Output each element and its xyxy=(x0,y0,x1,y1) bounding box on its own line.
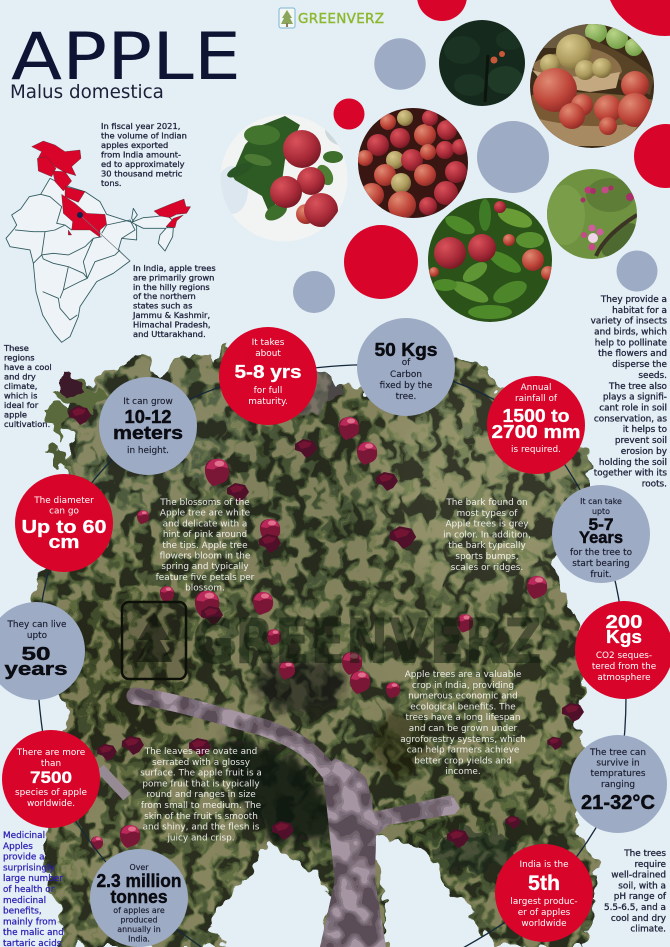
stat: 5th largest producer: largest produc- xyxy=(510,897,578,907)
stat: production: 2.3 million xyxy=(96,870,182,891)
text: bark: sports bumps, xyxy=(455,552,519,562)
stat: height: It can grow xyxy=(123,397,173,407)
text: export volume: In fiscal year 2021, xyxy=(101,121,180,131)
text: leaves and fruit: surface. The apple fruit is a xyxy=(140,769,262,779)
text: economic benefits: Apple trees are a valuable xyxy=(405,670,521,680)
text: soil requirements: climate. xyxy=(630,925,666,935)
stat: years to fruit: for the tree to xyxy=(570,548,632,558)
photo: dark apple tree xyxy=(439,20,525,106)
text: blossoms: The blossoms of the xyxy=(159,498,250,508)
text: habitat and soil conservation: prevent soil xyxy=(615,436,667,446)
stat: temperature: tempratures xyxy=(591,769,646,779)
text: leaves and fruit: and shiny, and the flesh is xyxy=(143,823,260,833)
stat: years to fruit: start bearing xyxy=(572,559,630,569)
stat: CO2 xyxy=(575,601,670,699)
stat: species xyxy=(2,730,100,828)
text: economic benefits: better crop yields and xyxy=(414,756,512,766)
text: climate: These xyxy=(3,343,29,353)
text: leaves and fruit: serrated with a glossy xyxy=(152,758,250,768)
text: blossoms: hint of pink around xyxy=(163,530,247,540)
stat: years to fruit: It can take xyxy=(580,497,622,506)
text: habitat and soil conservation: variety of insects xyxy=(591,317,667,327)
text: export volume: ed to approximately xyxy=(101,159,185,169)
text: medicinal apples: medicinal xyxy=(3,896,46,906)
stat: lifespan: 50 xyxy=(22,643,50,664)
watermark logo xyxy=(122,602,542,679)
text: climate xyxy=(3,343,52,429)
text: habitat and soil conservation: disperse the xyxy=(612,360,667,370)
text: growing regions: states such as xyxy=(133,301,192,311)
text: habitat and soil conservation: plays a signifi- xyxy=(603,393,667,403)
text: export volume: apples exported xyxy=(101,140,168,150)
text: habitat and soil conservation: conservation, as xyxy=(594,414,667,424)
text: blossoms: flowers bloom in the xyxy=(160,552,250,562)
connecting ring xyxy=(36,365,626,947)
text: habitat and soil conservation: the flowers and xyxy=(598,349,667,359)
text: habitat and soil conservation: They provide a xyxy=(600,295,667,305)
logo xyxy=(279,8,384,28)
stat: 5th largest producer xyxy=(495,844,593,942)
photo: apple blossoms xyxy=(547,169,637,259)
text: export volume: 30 thousand metric xyxy=(101,168,183,178)
text: economic benefits: numerous economic and xyxy=(408,692,518,702)
text: habitat and soil conservation: holding the soil xyxy=(599,458,667,468)
text: medicinal apples: of health or xyxy=(3,885,55,895)
text: climate: apple xyxy=(4,410,27,420)
stat: years to fruit: fruit. xyxy=(590,570,612,580)
text: leaves and fruit: pome fruit that is typically xyxy=(142,779,260,789)
text: soil requirements: well-drained xyxy=(611,871,666,881)
photo: apples among leaves xyxy=(428,198,555,322)
text: economic benefits: trees have a long lifespan xyxy=(406,713,520,723)
stat: lifespan xyxy=(0,602,85,700)
text: growing regions xyxy=(132,263,216,339)
text: climate: cultivation. xyxy=(4,419,50,429)
text: habitat and soil conservation: cant role in soil xyxy=(599,404,667,414)
text: export volume xyxy=(101,121,187,188)
text: soil requirements: require xyxy=(634,860,666,870)
stat: 5th largest producer: India is the xyxy=(519,860,569,870)
stat: height: 10-12 xyxy=(124,406,172,427)
stat: CO2: CO2 seques- xyxy=(596,651,652,661)
stat: 50 kgs carbon xyxy=(357,318,455,416)
stat: diameter: cm xyxy=(48,531,80,552)
stat: production: India. xyxy=(128,934,150,944)
text: medicinal apples: Medicinal xyxy=(3,831,45,841)
subtitle: Malus domestica xyxy=(10,82,164,103)
text: growing regions: and Uttarakhand. xyxy=(133,329,206,339)
text: habitat and soil conservation: and birds, which xyxy=(594,328,667,338)
text: bark: in color. In addition, xyxy=(443,530,531,540)
stat: CO2: atmosphere xyxy=(597,673,651,683)
text: export volume: the volume of Indian xyxy=(101,130,187,140)
text: blossoms: Apple tree are white xyxy=(160,509,250,519)
text: export volume: tons. xyxy=(101,178,122,188)
text: habitat and soil conservation: seeds. xyxy=(638,371,667,381)
text: leaves and fruit: The leaves are ovate and xyxy=(144,747,257,757)
text: economic benefits: can help farmers achieve xyxy=(407,746,519,756)
text: medicinal apples: the malic and xyxy=(3,928,64,938)
stat: 5-8 years to maturity: maturity. xyxy=(248,397,288,407)
stat: years to fruit: 5-7 xyxy=(588,515,614,534)
stat: 5-8 years to maturity: about xyxy=(255,349,281,359)
text: bark: the bark typically xyxy=(448,541,526,551)
text: economic benefits: income. xyxy=(445,767,481,777)
text: climate: and dry xyxy=(4,372,36,382)
stat: production: Over xyxy=(130,863,149,872)
stat: production: of apples are xyxy=(113,906,165,915)
stat: rainfall: rainfall of xyxy=(515,394,558,404)
text: medicinal apples: Apples xyxy=(3,842,33,852)
stat: production: annually in xyxy=(117,925,161,934)
text: economic benefits xyxy=(400,670,526,777)
text: growing regions: are primarily grown xyxy=(133,272,214,282)
stat: diameter: The diameter xyxy=(33,496,94,506)
stat: 50 kgs carbon: 50 Kgs xyxy=(374,339,438,360)
stat: production: produced xyxy=(120,916,158,924)
text: economic benefits: crop in India, providing xyxy=(412,681,514,691)
stat: rainfall xyxy=(487,376,585,474)
text: soil requirements: The trees xyxy=(623,849,666,859)
title: APPLE xyxy=(11,20,241,95)
stat: lifespan: They can live xyxy=(6,620,66,630)
tree canopy xyxy=(30,342,602,947)
stat: 50 kgs carbon: Carbon xyxy=(390,370,422,380)
text: climate: have a cool xyxy=(4,362,52,372)
stat: 50 kgs carbon: tree. xyxy=(396,392,416,402)
stat: rainfall: Annual xyxy=(521,383,551,393)
text: soil requirements: cool and dry xyxy=(611,914,666,924)
map of India xyxy=(6,141,191,342)
text: growing regions: of the northern xyxy=(133,291,196,301)
stat: species: 7500 xyxy=(30,768,72,787)
text: habitat and soil conservation: erosion by xyxy=(621,447,667,457)
stat: diameter: Up to 60 xyxy=(22,516,106,537)
stat: temperature: 21-32°C xyxy=(581,792,655,814)
text: export volume: from India amount- xyxy=(101,150,181,160)
stat: temperature xyxy=(569,735,667,833)
text: growing regions: in the hilly regions xyxy=(133,282,210,292)
text: climate: ideal for xyxy=(4,400,39,410)
watermark logo: GREENVERZ xyxy=(192,605,542,678)
stat: diameter xyxy=(15,474,113,572)
text: economic benefits: and can be grown under xyxy=(409,724,518,734)
stat: lifespan: years xyxy=(4,658,68,679)
text: climate: which is xyxy=(4,390,37,400)
text: climate: regions xyxy=(4,352,35,362)
text: habitat and soil conservation xyxy=(591,295,667,490)
stat: 50 kgs carbon: fixed by the xyxy=(380,381,432,391)
stat: CO2: 200 xyxy=(606,611,642,632)
text: soil requirements: pH range of xyxy=(614,892,667,902)
photo: apples on branch xyxy=(221,114,348,242)
stat: 50 kgs carbon: of xyxy=(402,358,411,368)
stat: years to fruit xyxy=(552,485,650,583)
stat: temperature: ranging xyxy=(601,780,635,790)
text: blossoms: feature five petals per xyxy=(156,573,255,583)
text: soil requirements xyxy=(604,849,667,935)
text: bark xyxy=(443,498,531,573)
stat: lifespan: upto xyxy=(27,631,47,641)
text: bark: The bark found on xyxy=(445,498,528,508)
text: blossoms: blossom. xyxy=(185,584,225,594)
text: medicinal apples: large number xyxy=(3,874,63,884)
text: medicinal apples: provide a xyxy=(3,853,45,863)
stat: rainfall: is required. xyxy=(511,445,561,455)
stat: temperature: survive in xyxy=(596,758,640,768)
stat: 5-8 years to maturity xyxy=(219,327,317,425)
text: blossoms: spring and typically xyxy=(161,562,249,572)
text: habitat and soil conservation: roots. xyxy=(642,480,667,490)
stat: 5th largest producer: 5th xyxy=(528,872,560,895)
text: bark: Apple trees is grey xyxy=(445,520,529,530)
stat: species: worldwide. xyxy=(27,799,75,809)
text: climate: climate, xyxy=(4,381,37,391)
stat: species: species of apple xyxy=(15,788,87,798)
stat: 5th largest producer: worldwide xyxy=(521,919,567,929)
text: habitat and soil conservation: help to pollinate xyxy=(595,338,667,348)
stat: species: than xyxy=(41,759,61,769)
text: medicinal apples: benefits, xyxy=(3,907,42,917)
stat: height: in height. xyxy=(127,446,169,456)
text: blossoms: and delicate with a xyxy=(163,519,247,529)
text: habitat and soil conservation: The tree also xyxy=(608,382,667,392)
decorative circles xyxy=(293,0,670,313)
apples on tree xyxy=(69,406,584,850)
text: blossoms xyxy=(156,498,255,594)
stat: production xyxy=(90,849,188,947)
text: medicinal apples: mainly from xyxy=(3,917,56,927)
stat: years to fruit: upto xyxy=(592,507,610,516)
stat: rainfall: 2700 mm xyxy=(492,421,580,442)
text: soil requirements: soil, with a xyxy=(618,881,666,891)
text: growing regions: Jammu & Kashmir, xyxy=(132,310,210,320)
text: growing regions: In India, apple trees xyxy=(133,263,216,273)
photo: apple baskets xyxy=(530,21,654,148)
stat: temperature: The tree can xyxy=(589,748,646,758)
text: bark: most types of xyxy=(457,509,518,519)
photo: heap of apples xyxy=(357,108,468,219)
text: medicinal apples: surprisingly xyxy=(3,863,55,873)
stat: 5-8 years to maturity: It takes xyxy=(252,338,285,348)
text: habitat and soil conservation: together with its xyxy=(594,469,667,479)
stat: years to fruit: Years xyxy=(579,528,623,547)
text: bark: scales or ridges. xyxy=(451,563,523,573)
text: leaves and fruit: from small to medium. The xyxy=(141,801,261,811)
text: leaves and fruit: round and ranges in size xyxy=(146,790,256,800)
text: medicinal apples xyxy=(3,831,64,947)
text: growing regions: Himachal Pradesh, xyxy=(133,319,210,329)
text: economic benefits: ecological benefits. The xyxy=(410,702,516,712)
text: leaves and fruit: juicy and crisp. xyxy=(166,833,235,843)
text: leaves and fruit xyxy=(140,747,262,843)
text: economic benefits: agroforestry systems, which xyxy=(400,735,526,745)
stat: production: tonnes xyxy=(110,886,168,907)
stat: height xyxy=(99,377,197,475)
stat: 5th largest producer: er of apples xyxy=(518,908,571,918)
stat: rainfall: 1500 to xyxy=(502,405,570,426)
text: blossoms: the tips. Apple tree xyxy=(162,541,248,551)
stat: CO2: tered from the xyxy=(592,662,656,672)
text: habitat and soil conservation: it helps to xyxy=(623,425,667,435)
stat: height: meters xyxy=(113,422,183,443)
stat: CO2: Kgs xyxy=(606,626,642,647)
stat: diameter: can go xyxy=(49,506,79,516)
text: habitat and soil conservation: habitat for a xyxy=(612,306,667,316)
text: soil requirements: 5.5-6.5, and a xyxy=(604,903,666,913)
stat: species: There are more xyxy=(16,748,85,758)
text: leaves and fruit: skin of the fruit is smooth xyxy=(144,812,258,822)
tree trunk and branches xyxy=(100,696,460,947)
stat: 5-8 years to maturity: 5-8 yrs xyxy=(234,361,302,382)
stat: 5-8 years to maturity: for full xyxy=(254,386,282,396)
logo: GREENVERZ xyxy=(298,11,384,27)
